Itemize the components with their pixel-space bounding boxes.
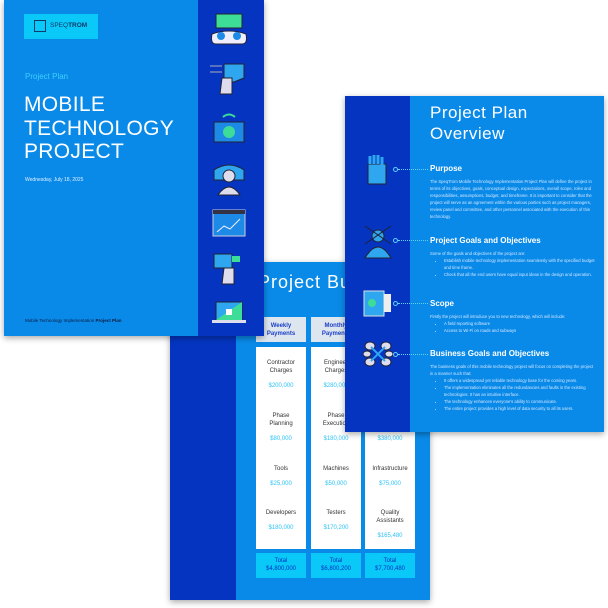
column: yearly: Total	[384, 558, 396, 564]
column: monthly: Total	[330, 558, 342, 564]
section: business goals: The technology enhances everyone's ability to communicate.	[444, 399, 557, 404]
column: yearly: $300,000	[377, 383, 403, 389]
section: business goals: The implementation eliminates all the redundancies and faults in the existing technologies. It has an intuitive interface.	[444, 385, 586, 397]
column: monthly: Testers	[326, 510, 346, 516]
column: monthly: $50,000	[325, 481, 347, 487]
column: weekly: Planning	[269, 421, 293, 427]
column: monthly	[311, 317, 361, 578]
section: business goals	[430, 349, 594, 411]
icon: network	[363, 342, 393, 366]
icon: person headset	[214, 165, 244, 195]
section: business goals: The entire project provides a high level of data security to all its users.	[444, 406, 573, 411]
page: overview	[345, 96, 604, 432]
column: monthly: $170,200	[323, 525, 349, 531]
column: weekly: Developers	[266, 510, 296, 516]
column: yearly	[365, 323, 415, 578]
date: Wednesday, July 18, 2025	[25, 177, 83, 183]
title: TECHNOLOGY	[24, 116, 174, 140]
column: monthly: $6,800,200	[321, 566, 351, 572]
section: scope: Firstly the project will introduce you to new technology, which will include:	[430, 314, 565, 319]
title: MOBILE	[24, 93, 105, 116]
icon: laptop lock	[212, 302, 246, 323]
column: yearly: Assistants	[376, 518, 404, 524]
section: goals: Some of the goals and objectives of the project are:	[430, 251, 525, 256]
column: weekly: $200,000	[268, 383, 294, 389]
icon: gamepad	[212, 14, 246, 44]
section: goals: Establish mobile technology implementation seamlessly with the specified budget and time frame.	[444, 258, 595, 270]
column: monthly: Engineer	[324, 360, 348, 366]
column: monthly: Charges	[325, 368, 347, 374]
heading: project budget: Project Budget	[258, 272, 390, 292]
column: monthly: Machines	[323, 466, 349, 472]
title: PROJECT	[24, 140, 124, 163]
column: weekly: Contractor	[267, 360, 295, 366]
column: monthly: Monthly	[324, 323, 348, 329]
logo	[24, 14, 98, 39]
icon strip	[198, 0, 264, 336]
column: yearly: Other	[382, 360, 398, 366]
subtitle: Project Plan	[25, 72, 68, 81]
column: monthly: Phase	[327, 413, 344, 419]
page: cover	[4, 0, 264, 336]
section: scope: Scope	[430, 299, 454, 308]
column: weekly: Payments	[267, 331, 295, 337]
column: yearly: $165,480	[377, 533, 403, 539]
column: monthly: $180,000	[323, 436, 349, 442]
title	[24, 93, 174, 163]
icon: phone wifi	[214, 114, 244, 142]
icon: tablet	[364, 290, 391, 316]
heading: overview	[430, 103, 528, 143]
column: weekly: Total	[275, 558, 287, 564]
column: weekly: Weekly	[271, 323, 291, 329]
section: business goals: The business goals of this mobile technology project will focus on completing the project in a manner such that:	[430, 364, 593, 376]
column: yearly: Infrastructure	[372, 466, 408, 472]
column: weekly: Tools	[274, 466, 288, 472]
column: yearly: Quality	[381, 510, 399, 516]
column: monthly: Execution	[323, 421, 349, 427]
section: purpose: The SpeqTrom Mobile Technology Implementation Project Plan will define the project in terms of its objectives, goals, conceptual design, expectations, overall scope, roles and responsibilities, assumptions, budget, and timeframe. It is important to consider that the project will serve as an agreement within the various parties such as project managers, review panel and committee, and other personnel associated with the execution of this technology.	[430, 179, 592, 219]
column: yearly: Yearly	[381, 323, 399, 329]
section: scope: Access to Wi-Fi on roads and subways	[444, 328, 516, 333]
column: weekly: $80,000	[270, 436, 292, 442]
heading: overview: Project Plan	[430, 103, 528, 122]
column: monthly: $280,000	[323, 383, 349, 389]
page: project budget	[170, 262, 430, 600]
column: yearly: Closing	[380, 421, 400, 427]
column: weekly: $4,800,000	[266, 566, 296, 572]
column: yearly: $380,000	[377, 436, 403, 442]
column: yearly: Payments	[376, 331, 404, 337]
section: goals: Project Goals and Objectives	[430, 236, 541, 245]
column: monthly: Payments	[322, 331, 350, 337]
section: business goals: Business Goals and Objectives	[430, 349, 549, 358]
icon: chart browser	[213, 210, 245, 236]
icon: vr head	[210, 64, 244, 94]
column: weekly: $25,000	[270, 481, 292, 487]
section: business goals: It offers a widespread yet reliable technology base for the coming years.	[444, 378, 577, 383]
icon: vr video	[214, 254, 240, 284]
column: weekly: $180,000	[268, 525, 294, 531]
logo: SPEQTROM	[50, 22, 87, 29]
icon: hand	[368, 155, 386, 184]
column: yearly: $7,700,480	[375, 566, 405, 572]
section: purpose: Purpose	[430, 164, 462, 173]
column: yearly: Phase	[381, 413, 398, 419]
column: yearly: $75,000	[379, 481, 401, 487]
column: weekly: Phase	[272, 413, 290, 419]
table: budget	[256, 317, 415, 578]
column: weekly	[256, 317, 306, 578]
section: scope: A field reporting software	[444, 321, 490, 326]
section: scope	[430, 299, 566, 333]
section: goals	[430, 236, 595, 277]
heading: overview: Overview	[430, 124, 505, 143]
icon: vr person	[364, 226, 392, 258]
section: goals: Check that all the end users have equal input ideas in the design and operation.	[444, 272, 592, 277]
column: yearly: Charges	[379, 368, 401, 374]
footer: Mobile Technology Implementation Project Plan	[25, 318, 121, 323]
column: weekly: Charges	[270, 368, 292, 374]
